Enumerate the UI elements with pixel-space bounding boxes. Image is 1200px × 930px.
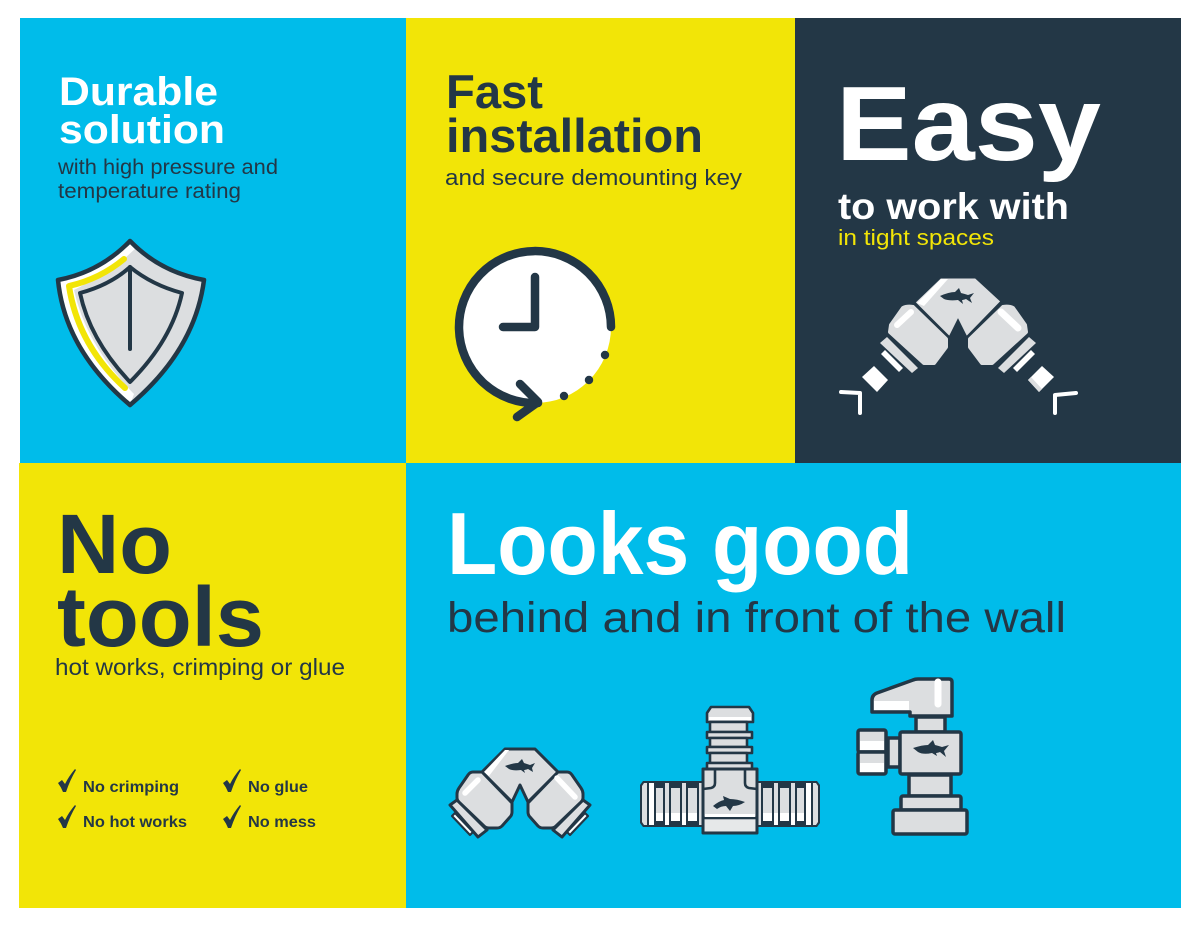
panel: looks good [406,463,1181,908]
text: hot works crimping or glue: hot works, crimping or glue [55,654,345,680]
subheading: behind and in front of the wall: behind and in front of the wall [447,594,1066,642]
heading: easy: Easy [836,65,1101,183]
subheading: to work with: to work with [838,186,1069,227]
heading: no tools: tools [57,570,264,664]
item: no mess [223,805,316,831]
icon: elbow fitting in tight space [841,279,1076,413]
item: no hot works: No hot works [83,814,187,831]
heading: durable solution [59,70,225,152]
panel: durable solution [20,18,406,463]
icon: tee fitting [640,707,820,833]
item: no mess: No mess [248,814,316,831]
item: no crimping: No crimping [83,779,179,796]
text: pressure and temperature rating: temperature rating [58,180,241,203]
item: no hot works [58,805,187,831]
icon: angle valve [858,679,967,834]
icon: elbow fitting [450,749,590,837]
tee right arm [757,781,820,827]
checklist [58,769,316,831]
heading: fast installation [446,65,703,162]
tee centre body [703,769,757,833]
text: secure demounting key: and secure demounting key [445,165,742,190]
icon: shark logo [505,759,535,773]
heading: looks good: Looks good [447,494,913,593]
panel: easy to work with [795,18,1181,463]
item: no glue: No glue [248,779,308,796]
icon: clock with arrow [459,251,611,417]
heading: fast installation: installation [446,109,703,162]
text: in tight spaces: in tight spaces [838,225,994,250]
tee top branch [707,707,753,769]
heading: no tools [57,497,264,664]
heading: fast installation: Fast [446,65,543,118]
item: no glue [223,769,308,796]
heading: no tools: No [57,497,172,591]
icon: shield [58,241,204,405]
text: pressure and temperature rating: with high pressure and [57,156,278,179]
item: no crimping [58,769,179,796]
icon: shark logo [713,796,745,811]
text: pressure and temperature rating [57,156,278,203]
heading: durable solution: Durable [59,70,218,114]
heading: durable solution: solution [59,108,225,152]
panel: no tools [19,463,406,908]
tee left arm [640,781,703,827]
icon: shark logo [913,740,949,757]
icon: shark logo [940,288,974,304]
panel: fast installation [406,18,795,463]
